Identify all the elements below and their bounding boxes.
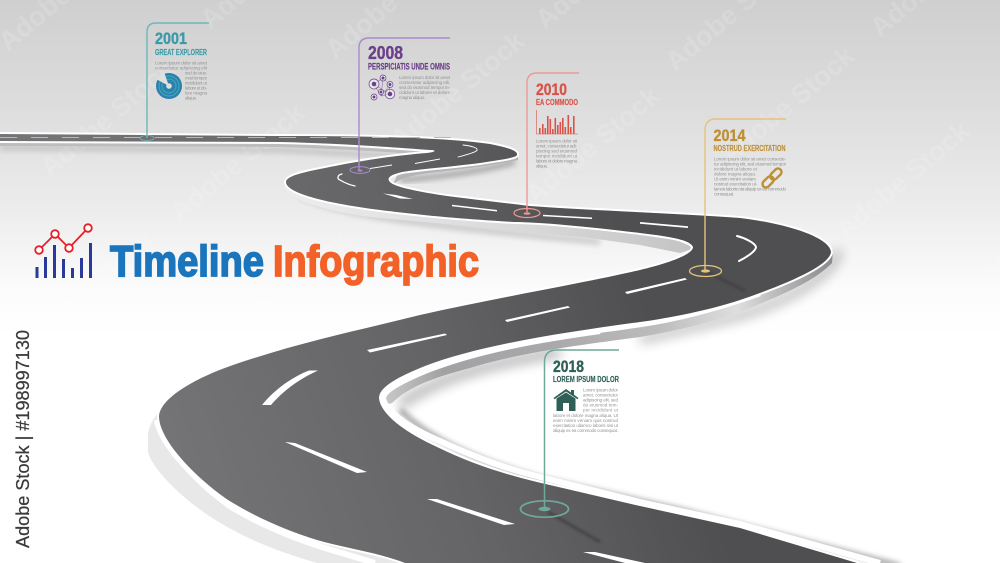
- subtitle: LOREM IPSUM DOLOR: [553, 374, 620, 384]
- road surface: [0, 134, 857, 563]
- logo line: [35, 224, 92, 254]
- body: sed do eius-: [185, 70, 207, 76]
- body: lore magna: [185, 90, 207, 96]
- body: aliquip ex ea commodo consequat.: [553, 428, 618, 433]
- body: Lorem ipsum dolor: [583, 388, 618, 392]
- body: [553, 388, 619, 433]
- white edge taper: right sweep: [540, 294, 760, 340]
- watermark: Adobe Stock: [385, 25, 531, 155]
- title: Timeline: [110, 237, 264, 286]
- pin shadow: [548, 512, 600, 542]
- title: Infographic: [273, 237, 479, 286]
- body: mod tempor: [185, 76, 207, 80]
- body: Lorem ipsum dolor sit amet consecte-: [714, 156, 786, 162]
- road white edge: [0, 134, 857, 563]
- body: cididunt ut labore et dolore: [399, 90, 450, 95]
- watermark: Adobe Stock: [35, 53, 181, 183]
- road side wall: far bend: [0, 140, 442, 155]
- body: dolore magna aliqua.: [714, 172, 756, 176]
- logo bars: [36, 243, 92, 278]
- body: incididunt ut: [185, 80, 208, 86]
- bar chart: [536, 110, 578, 134]
- milestone 2018: [520, 350, 620, 542]
- year: 2001: [155, 29, 187, 48]
- watermark: Adobe Stock: [855, 415, 1000, 545]
- body: tur adipiscing elit, sed eiusmod tempor: [714, 162, 786, 166]
- curved dashes: [338, 145, 756, 261]
- milestone 2008: [350, 38, 451, 173]
- watermark: Adobe Stock: [715, 40, 861, 170]
- logo icon: [35, 224, 92, 278]
- stock id vertical text: Adobe Stock | #198997130: [13, 330, 33, 548]
- pin shadow: [707, 272, 745, 291]
- pin: [350, 38, 450, 173]
- subtitle: EA COMMODO: [536, 97, 578, 107]
- body: magna aliqua.: [399, 95, 425, 100]
- body: Lorem ipsum dolor sit: [536, 138, 578, 144]
- body: Lorem ipsum dolor sit amet: [155, 60, 208, 66]
- body: consectetur adipiscing elit,: [399, 80, 450, 85]
- body: enim minim veniam quis nostrud: [553, 418, 618, 423]
- body: labore et do-: [185, 86, 207, 90]
- body: incididunt ut labore et: [714, 166, 758, 172]
- body: piscing sed eiusmod: [536, 148, 577, 154]
- pin: [690, 119, 786, 276]
- thick white edge: front curve: [157, 420, 375, 563]
- subtitle: PERSPICIATIS UNDE OMNIS: [368, 62, 450, 72]
- milestone 2001: [140, 23, 209, 140]
- year: 2010: [536, 80, 567, 99]
- curved dash: big bend: [262, 370, 318, 405]
- lane dashes far: [0, 136, 455, 138]
- body: amet, consectetur: [583, 392, 618, 398]
- pin: [140, 23, 209, 140]
- body: Lorem ipsum dolor sit amet: [399, 75, 451, 80]
- subtitle: GREAT EXPLORER: [155, 47, 208, 57]
- watermark: Adobe Stock: [670, 275, 816, 405]
- body: lamcis laboris nisi aliquip ex ea commodo: [714, 186, 786, 192]
- body: do eiusmod tem-: [583, 402, 618, 408]
- icon: people network: [369, 75, 395, 100]
- road side wall: front left: [148, 412, 420, 563]
- watermark: Adobe Stock: [520, 80, 666, 210]
- watermark: Adobe Stock: [165, 97, 311, 227]
- body: exercitation ullamco laboris nisi ut: [553, 423, 619, 428]
- body: labore et dolore magna aliqua. Ut: [553, 413, 619, 418]
- body: [536, 138, 578, 168]
- pin: [514, 73, 579, 218]
- body: por incididunt ut: [583, 408, 619, 412]
- subtitle: NOSTRUD EXERCITATION: [714, 143, 786, 153]
- watermark: Adobe Stock: [720, 385, 866, 515]
- icon: house: [554, 389, 578, 411]
- body: sed do eiusmod tempor in-: [399, 85, 450, 90]
- body: amet, consectetur adi-: [536, 144, 577, 148]
- icon: radial chart: [156, 72, 182, 99]
- body: consequat.: [714, 192, 734, 196]
- road drop shadows: [0, 148, 900, 563]
- body: adipiscing elit, sed: [583, 398, 618, 402]
- year: 2008: [368, 43, 403, 63]
- body: aliqua.: [536, 164, 548, 168]
- lane dashes: [285, 158, 688, 563]
- body: aliqua.: [185, 96, 197, 100]
- body: nostrud exercitation ul-: [714, 182, 757, 186]
- body: tempor incididunt ut: [536, 154, 578, 158]
- body: [399, 75, 451, 100]
- year: 2018: [553, 357, 584, 376]
- body: [155, 60, 208, 100]
- body: Ut enim minim veniam: [714, 176, 756, 182]
- year: 2014: [714, 126, 746, 145]
- road side wall: middle lane: [284, 170, 695, 253]
- milestone 2014: [690, 119, 786, 291]
- body: [714, 156, 786, 196]
- body: consectetur adipiscing elit: [155, 66, 208, 70]
- watermark: Adobe Stock: [45, 385, 191, 515]
- watermark: Adobe Stock: [830, 115, 976, 245]
- pin: [520, 350, 619, 517]
- road: [0, 134, 900, 563]
- watermark: Adobe Stock: [165, 430, 311, 560]
- road side wall: upper right bend: [392, 150, 518, 186]
- watermark: Adobe Stock: [15, 225, 161, 355]
- thick white edge: inner curve: [383, 331, 880, 563]
- milestone 2010: [514, 73, 579, 218]
- watermark: Adobe Stock: [210, 225, 356, 355]
- road side wall: right sweep: [378, 250, 833, 405]
- body: labore et dolore magna: [536, 158, 577, 164]
- icon: chain link: [761, 167, 783, 189]
- title: [110, 237, 479, 286]
